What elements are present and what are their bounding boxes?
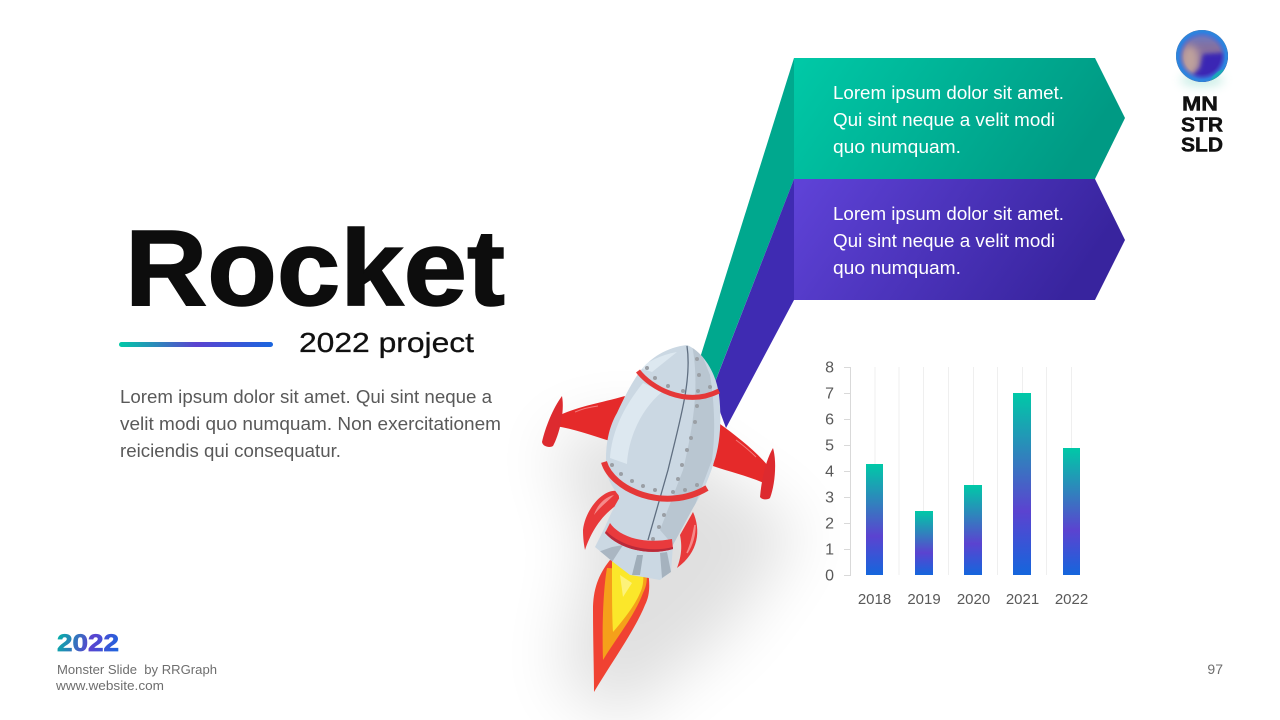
bar chart: 2022 <box>1055 591 1088 608</box>
banner: purple: Lorem ipsum dolor sit amet. <box>833 203 1064 224</box>
bar chart <box>825 360 1088 608</box>
footer credit: www.website.com <box>55 678 164 693</box>
title: Rocket <box>125 207 505 328</box>
flame <box>593 560 649 692</box>
banner: teal: Lorem ipsum dolor sit amet. <box>833 82 1064 103</box>
bar chart: 2020 <box>957 591 990 608</box>
title underline <box>119 342 273 347</box>
rocket body <box>595 345 720 580</box>
bar chart: 2019 <box>907 591 941 608</box>
logo text: STR <box>1181 114 1224 136</box>
ribbon side: purple <box>712 179 794 428</box>
bar chart: 5 <box>825 438 834 454</box>
bar chart: 8 <box>825 360 834 376</box>
description text: Lorem ipsum dolor sit amet. Qui sint neque a <box>120 386 493 407</box>
bar chart: 7 <box>825 386 834 402</box>
banner: purple: Qui sint neque a velit modi <box>833 230 1055 251</box>
subtitle: 2022 project <box>299 327 474 358</box>
bar chart: 4 <box>825 464 834 480</box>
logo <box>1176 30 1228 152</box>
rocket shadow <box>550 420 800 720</box>
rivets <box>610 357 712 541</box>
footer credit <box>55 662 217 693</box>
left wing <box>542 396 625 447</box>
rocket illustration <box>542 345 775 692</box>
ribbon side: teal <box>700 58 794 382</box>
bar chart: 0 <box>825 568 834 584</box>
banner: teal: Qui sint neque a velit modi <box>833 109 1055 130</box>
page number: 97 <box>1207 661 1223 677</box>
bar chart: 6 <box>825 412 834 428</box>
banner: teal <box>794 58 1125 179</box>
logo text: MN <box>1182 94 1218 116</box>
footer credit: Monster Slide by RRGraph <box>57 662 217 677</box>
red bands <box>604 371 719 552</box>
logo text: SLD <box>1181 134 1223 156</box>
bar chart: 1 <box>825 542 834 558</box>
icon: sphere <box>1176 30 1232 87</box>
bar chart: 2 <box>825 516 834 532</box>
logo text <box>1181 94 1224 156</box>
description text: velit modi quo numquam. Non exercitationem <box>120 413 501 434</box>
banner: teal: quo numquam. <box>833 136 961 157</box>
bar chart: 2021 <box>1006 591 1039 608</box>
description text <box>120 386 501 461</box>
bar chart: 2018 <box>858 591 891 608</box>
banner: purple <box>794 179 1125 300</box>
right wing <box>713 424 775 499</box>
description text: reiciendis qui consequatur. <box>120 440 341 461</box>
rear fins <box>583 491 697 568</box>
footer year: 2022 <box>57 630 119 657</box>
banner: purple: quo numquam. <box>833 257 961 278</box>
bar chart: 3 <box>825 490 834 506</box>
